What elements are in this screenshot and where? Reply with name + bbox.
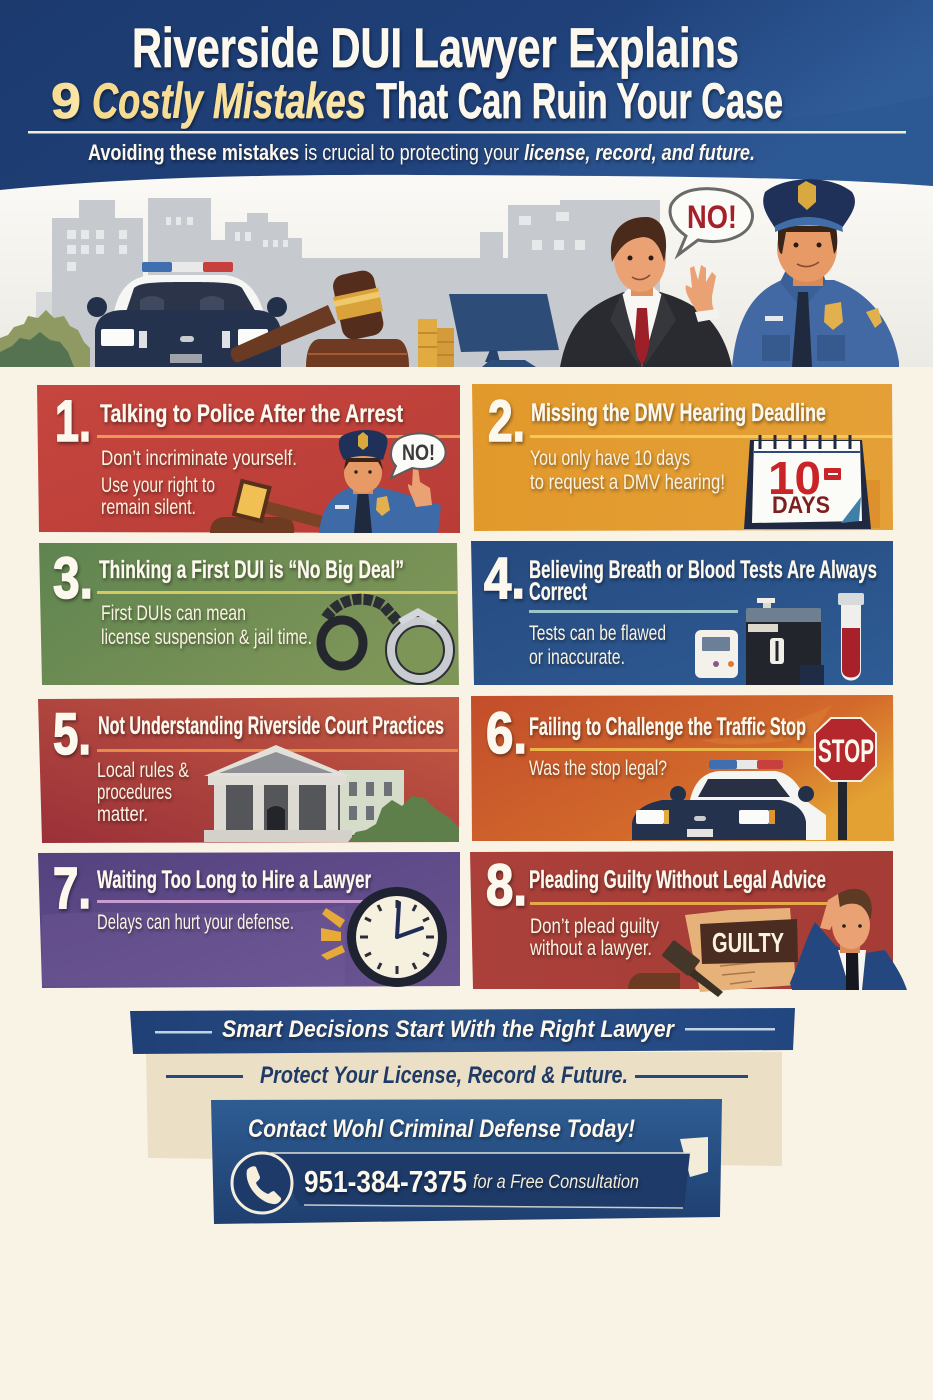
hero gavel: [231, 268, 409, 367]
icon: breathalyzer devices: [695, 593, 864, 685]
icon: calendar 10 days: 10: [768, 452, 821, 504]
panel 5 body: [97, 759, 189, 826]
panel 1 heading: Talking to Police After the Arrest: [100, 400, 404, 428]
icon: officer: [319, 430, 441, 533]
speech bubble: NO!: [670, 189, 752, 255]
panel 2 heading: Missing the DMV Hearing Deadline: [531, 399, 826, 427]
panel 8 body: without a lawyer.: [529, 937, 652, 960]
panel 6: traffic stop: [471, 695, 894, 841]
panel 3 number: 3.: [53, 546, 93, 611]
icon: calendar 10 days: DAYS: [772, 492, 830, 519]
panel 3 body: First DUIs can mean: [101, 602, 246, 625]
icon: handcuffs: [321, 599, 449, 679]
panel 1 body: Don’t incriminate yourself.: [101, 447, 297, 470]
ribbon fold: [680, 1137, 708, 1177]
panel 4 body: [529, 622, 666, 669]
speech bubble: NO!: [391, 433, 446, 478]
panel 8 body: [529, 915, 659, 960]
icon: police car: [632, 760, 826, 840]
icon: stop sign: STOP: [818, 733, 874, 769]
hero police car: [87, 262, 287, 367]
panel 8 body: Don’t plead guilty: [530, 915, 659, 938]
banner: smart decisions: [130, 1008, 795, 1054]
icon: folder and guilty plate: [685, 908, 798, 992]
panel 2 number: 2.: [488, 389, 525, 454]
panel 4 body: or inaccurate.: [529, 646, 625, 669]
panel 5 heading: Not Understanding Riverside Court Practices: [98, 712, 444, 740]
panel 7 heading: Waiting Too Long to Hire a Lawyer: [97, 866, 371, 894]
header band: [0, 0, 933, 190]
cream call-to-action panel: [146, 1052, 782, 1166]
panel 7: waiting too long: [38, 852, 460, 988]
panel 1 body: remain silent.: [101, 496, 196, 519]
bush left: [0, 310, 90, 367]
panel 6 body: Was the stop legal?: [529, 757, 667, 780]
panel 4 heading: Correct: [529, 578, 587, 606]
speech bubble: NO!: NO!: [687, 199, 737, 235]
coin stacks: [418, 319, 454, 367]
panel 2 body: to request a DMV hearing!: [530, 471, 725, 494]
title: 9: [51, 73, 81, 129]
subtitle: Avoiding these mistakes is crucial to protecting your license, record, and future.: [88, 140, 755, 165]
panel 5: court practices: [38, 697, 459, 843]
panel 5 body: procedures: [97, 781, 172, 804]
hero scene backdrop: [0, 170, 933, 367]
panel 2: DMV deadline: [472, 384, 893, 531]
icon: trees: [348, 796, 459, 842]
panel 1 body: [101, 447, 297, 519]
lawyer: [560, 217, 732, 367]
header rule: [28, 131, 906, 134]
panel 3: first DUI: [39, 543, 459, 685]
panel 3 body: license suspension & jail time.: [101, 626, 312, 649]
panel 3 heading: Thinking a First DUI is “No Big Deal”: [99, 556, 404, 584]
icon: folder and guilty plate: GUILTY: [712, 927, 784, 958]
panel 8: pleading guilty: [470, 851, 907, 997]
panel 1 number: 1.: [55, 389, 91, 454]
panel 4 number: 4.: [484, 546, 525, 611]
skyline: [36, 198, 660, 367]
icon: gavel: [210, 479, 345, 533]
panel 7 body: Delays can hurt your defense.: [97, 911, 294, 934]
panel 8 number: 8.: [486, 853, 527, 918]
phone number: 951-384-7375: [304, 1164, 467, 1199]
panel 5 number: 5.: [53, 702, 91, 767]
panel 4 heading: [529, 556, 877, 606]
title: Costly Mistakes: [92, 73, 366, 129]
contact panel: [211, 1099, 722, 1224]
panel 3 body: [101, 602, 312, 649]
icon: clock: [321, 887, 447, 987]
icon: stop sign: [815, 718, 876, 840]
title: [51, 16, 783, 129]
icon: courthouse: [204, 745, 352, 842]
panel 2 body: [530, 447, 725, 494]
icon: side building: [339, 770, 404, 835]
icon: gavel: [628, 940, 723, 997]
icon: stressed man: [790, 889, 907, 990]
tagline: protect your license: Protect Your License, Record & Future.: [260, 1062, 628, 1089]
cream ground: [0, 367, 933, 1400]
panel 5 body: matter.: [97, 803, 148, 826]
panel 1: talking to police: [37, 385, 460, 533]
icon: phone: [232, 1153, 292, 1213]
panel 4 body: Tests can be flawed: [529, 622, 666, 645]
icon: calendar 10 days: [744, 435, 871, 529]
panel 7 number: 7.: [53, 856, 91, 921]
panel 5 body: Local rules &: [97, 759, 189, 782]
phone ribbon: [270, 1153, 691, 1208]
panel 1 body: Use your right to: [101, 474, 215, 497]
title: Riverside DUI Lawyer Explains: [132, 16, 739, 79]
panel 6 number: 6.: [486, 701, 527, 766]
monitor: [449, 294, 559, 367]
panel 4: breath and blood tests: [471, 541, 893, 685]
speech bubble: NO!: NO!: [402, 440, 435, 465]
panel 2 body: You only have 10 days: [530, 447, 690, 470]
banner: smart decisions: Smart Decisions Start With the Right Lawyer: [222, 1016, 675, 1043]
free consultation: for a Free Consultation: [473, 1172, 639, 1193]
contact heading: Contact Wohl Criminal Defense Today!: [248, 1115, 635, 1143]
officer: [732, 179, 899, 367]
